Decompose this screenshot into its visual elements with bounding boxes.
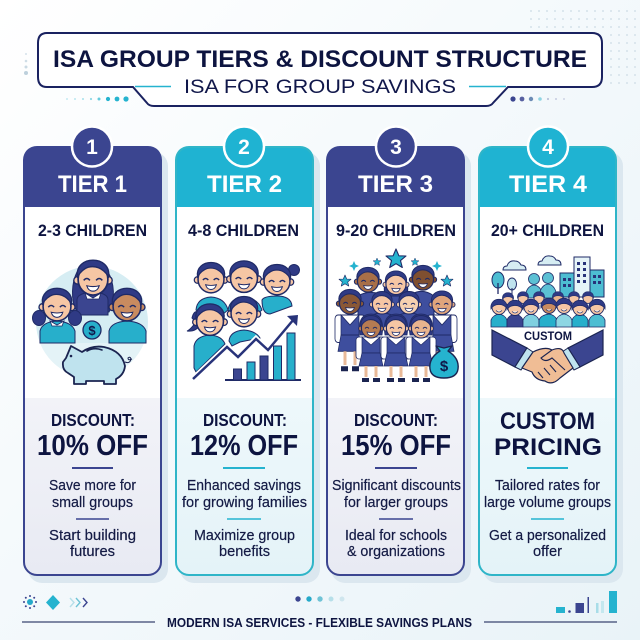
number badge 1: 1: [86, 136, 98, 159]
number badge 4: [528, 126, 568, 166]
children count: 20+ CHILDREN: [491, 221, 604, 240]
secondary benefit text: Start building: [49, 528, 136, 544]
benefit text: Significant discounts: [332, 478, 461, 494]
icon: small bar chart: [556, 591, 617, 613]
secondary benefit text: benefits: [219, 544, 270, 560]
panel: tier 4: [479, 126, 623, 583]
tier 3 heading: TIER 3: [358, 171, 433, 198]
secondary benefit text: & organizations: [347, 544, 445, 560]
children count: 4-8 CHILDREN: [188, 221, 299, 240]
title: ISA GROUP TIERS & DISCOUNT STRUCTURE: [53, 46, 587, 73]
background dot texture: [24, 6, 640, 88]
tier 2 heading: TIER 2: [207, 171, 282, 198]
illustration: children and piggy bank: $: [88, 323, 96, 338]
discount label: DISCOUNT:: [203, 410, 287, 430]
footer text: MODERN ISA SERVICES - FLEXIBLE SAVINGS PLANS: [167, 615, 472, 630]
number badge 2: 2: [238, 136, 250, 159]
icon: diamond: [46, 595, 60, 610]
discount value: 15% OFF: [341, 430, 451, 462]
custom heading: CUSTOM: [500, 408, 595, 435]
children count: 9-20 CHILDREN: [336, 221, 456, 240]
benefit text: large volume groups: [484, 495, 611, 511]
tier 4 heading: TIER 4: [509, 171, 588, 198]
secondary benefit text: Get a personalized: [489, 528, 606, 544]
number badge 1: [72, 126, 112, 166]
discount label: DISCOUNT:: [354, 410, 438, 430]
illustration: children and piggy bank: [32, 260, 148, 384]
subtitle accent lines: [135, 86, 506, 88]
icon: chevrons: [70, 598, 87, 607]
footer: [22, 591, 617, 630]
children count: 2-3 CHILDREN: [38, 221, 147, 240]
discount value: 10% OFF: [37, 430, 148, 462]
custom label: CUSTOM: [524, 331, 572, 343]
number badge 4: 4: [542, 136, 554, 159]
panel: tier 1: [24, 126, 168, 583]
subtitle: ISA FOR GROUP SAVINGS: [184, 77, 456, 98]
benefit text: for larger groups: [344, 495, 448, 511]
number badge 2: [224, 126, 264, 166]
benefit text: Enhanced savings: [187, 478, 301, 494]
benefit text: Tailored rates for: [495, 478, 600, 494]
illustration: uniformed students, stars and money bag: $: [440, 358, 449, 375]
panel: tier 3: [327, 126, 471, 583]
secondary benefit text: Ideal for schools: [345, 528, 447, 544]
secondary benefit text: offer: [533, 544, 562, 560]
discount label: DISCOUNT:: [51, 410, 135, 430]
panel: tier 2: [176, 126, 320, 583]
number badge 3: [376, 126, 416, 166]
right decorative dots: [510, 96, 565, 102]
custom heading: PRICING: [494, 434, 602, 461]
illustration: crowd, city and handshake: [491, 256, 605, 383]
left decorative dots: [66, 96, 129, 102]
pagination dots: [295, 596, 344, 602]
title banner: [38, 33, 602, 106]
benefit text: small groups: [52, 495, 133, 511]
number badge 3: 3: [390, 136, 402, 159]
benefit text: for growing families: [182, 495, 307, 511]
icon: sun dots: [23, 595, 37, 609]
secondary benefit text: Maximize group: [194, 528, 295, 544]
benefit text: Save more for: [49, 478, 136, 494]
illustration: children and growth chart: [187, 261, 301, 380]
illustration: uniformed students, stars and money bag: [335, 249, 458, 382]
secondary benefit text: futures: [70, 544, 115, 560]
discount value: 12% OFF: [190, 430, 298, 462]
tier 1 heading: TIER 1: [58, 171, 127, 198]
